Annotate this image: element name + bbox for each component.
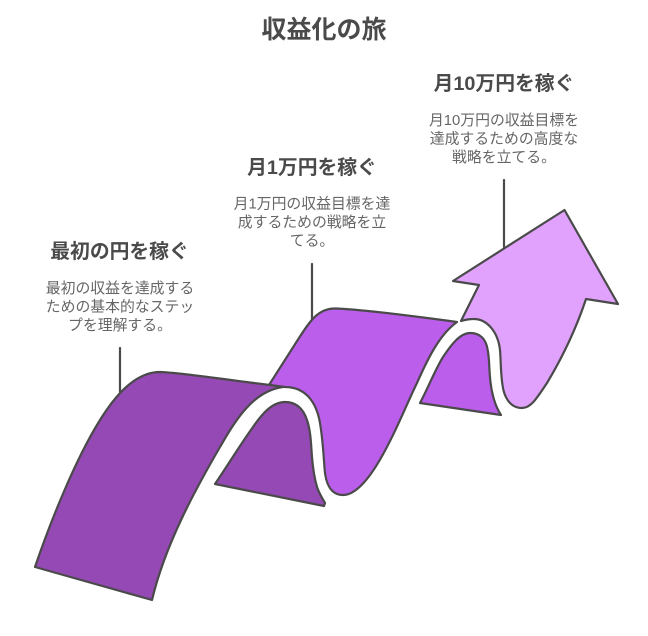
heading: step 1: 最初の円を稼ぐ: [50, 241, 189, 263]
middle band back fold: [420, 333, 501, 415]
description: step 2: 月1万円の収益目標を達: [234, 196, 390, 212]
first band back fold: [215, 402, 325, 506]
heading: step 2: 月1万円を稼ぐ: [247, 157, 377, 179]
step 1: first yen: [46, 241, 194, 392]
description: step 2: 成するための戦略を立: [238, 214, 386, 231]
description: step 1: プを理解する。: [68, 317, 172, 334]
title: 収益化の旅: [261, 16, 387, 44]
leader line: step 1: [119, 348, 121, 392]
description: step 3: [429, 112, 579, 166]
leader line: step 2: [311, 264, 313, 322]
middle band: [269, 308, 457, 495]
description: step 2: てる。: [290, 234, 334, 250]
description: step 2: [234, 196, 390, 250]
description: step 1: [46, 280, 194, 334]
leader line: step 3: [503, 180, 505, 247]
step 2: 10,000 yen per month: [234, 157, 390, 322]
first band: [35, 372, 283, 600]
description: step 3: 達成するための高度な: [430, 130, 578, 148]
description: step 3: 月10万円の収益目標を: [429, 112, 579, 129]
description: step 3: 戦略を立てる。: [452, 149, 556, 166]
step 3: 100,000 yen per month: [429, 73, 579, 247]
arrow head segment: [453, 210, 618, 408]
description: step 1: ための基本的なステッ: [46, 298, 194, 316]
description: step 1: 最初の収益を達成する: [46, 280, 194, 297]
arrow graphic: [35, 210, 618, 600]
heading: step 3: 月10万円を稼ぐ: [434, 73, 574, 95]
